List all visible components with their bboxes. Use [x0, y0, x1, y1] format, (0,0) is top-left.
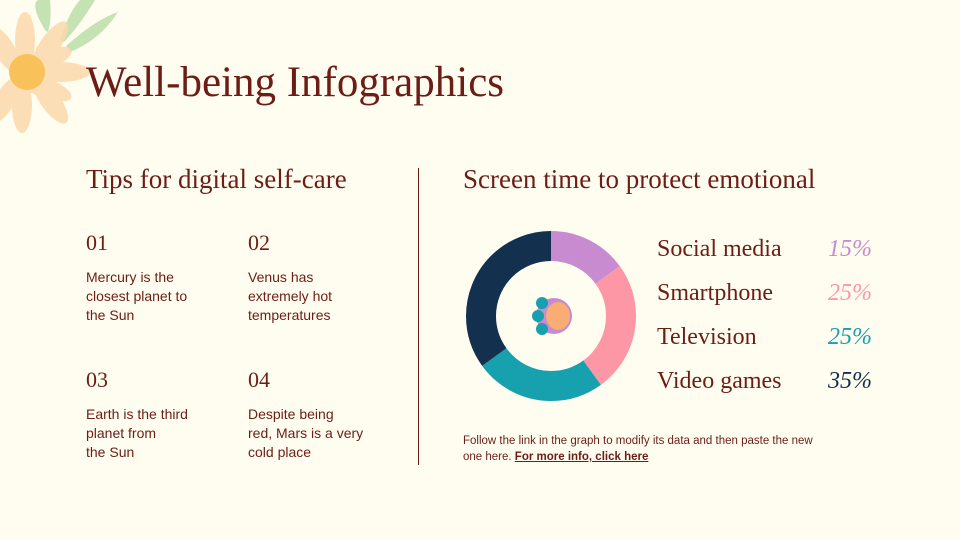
tip 04 [248, 367, 364, 460]
tip 03: the Sun [86, 444, 134, 460]
decoration: flower [0, 0, 118, 133]
tip 02: Venus has [248, 269, 313, 285]
tip 01: closest planet to [86, 288, 187, 304]
tip 03: 03 [86, 367, 108, 392]
tip 01: Mercury is the [86, 269, 174, 285]
legend: Video games [657, 368, 782, 394]
icon: brain [532, 297, 572, 335]
heading: tips: Tips for digital self-care [86, 164, 347, 194]
tip 03 [86, 367, 188, 460]
tip 04: Despite being [248, 406, 334, 422]
tip 03: planet from [86, 425, 156, 441]
tip 01 [86, 230, 187, 323]
legend: Smartphone [657, 280, 773, 306]
legend: Social media [657, 236, 782, 262]
footnote [463, 435, 813, 463]
tip 02 [248, 230, 332, 323]
tip 02: temperatures [248, 307, 330, 323]
tip 01: 01 [86, 230, 108, 255]
tip 02: 02 [248, 230, 270, 255]
tip 04: red, Mars is a very [248, 425, 363, 441]
tip 02: extremely hot [248, 288, 332, 304]
legend: 35% [828, 368, 872, 394]
legend: 25% [828, 324, 872, 350]
tip 01: the Sun [86, 307, 134, 323]
legend: 15% [828, 236, 872, 262]
tip 03: Earth is the third [86, 406, 188, 422]
donut chart [466, 231, 636, 401]
footnote: one here. For more info, click here [463, 451, 648, 463]
legend [657, 236, 872, 394]
legend: 25% [828, 280, 872, 306]
tip 04: cold place [248, 444, 311, 460]
heading: screen time: Screen time to protect emotional [463, 164, 815, 194]
footnote: Follow the link in the graph to modify its data and then paste the new [463, 435, 813, 447]
legend: Television [657, 324, 757, 350]
title: Well-being Infographics [86, 59, 504, 106]
tip 04: 04 [248, 367, 270, 392]
